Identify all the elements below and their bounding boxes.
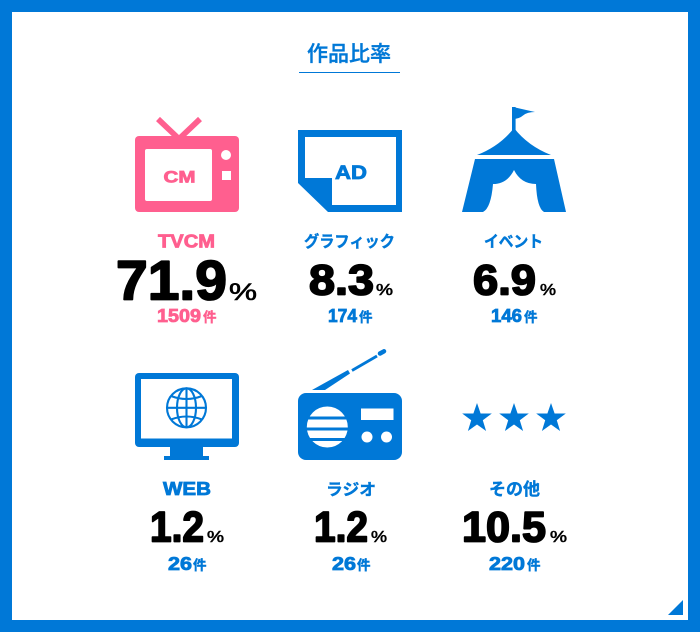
- count: 174: 174: [328, 305, 358, 326]
- label: radio: ラジオ: [326, 476, 376, 500]
- label: event: イベント: [484, 228, 543, 252]
- panel: web: [135, 373, 239, 574]
- count: 26: 26: [168, 553, 192, 574]
- value: 10.5%: %: [550, 529, 567, 546]
- value: 71.9%: %: [229, 279, 257, 306]
- label: other: その他: [489, 475, 540, 500]
- count: 146: 146: [491, 305, 522, 326]
- value: 8.3%: 8.3: [309, 256, 374, 304]
- panel: TVCM: [116, 119, 257, 326]
- count: 174: [328, 305, 373, 326]
- panel: radio: [298, 351, 402, 574]
- count: 1509: 1509: [157, 305, 201, 326]
- label: TVCM: TVCM: [158, 232, 215, 252]
- value: 1.2%: %: [207, 529, 224, 546]
- count: 174: 件: [359, 306, 373, 326]
- value: 8.3%: %: [376, 282, 393, 299]
- icon: television: [135, 119, 239, 212]
- value: 71.9%: 71.9: [116, 248, 227, 312]
- count: 26: 件: [193, 554, 207, 574]
- count: 146: 件: [524, 306, 538, 326]
- icon: AD sheet: AD: [335, 163, 367, 184]
- count: 26: [332, 553, 371, 574]
- icon: three stars: [462, 403, 566, 431]
- value: 1.2%: 1.2: [314, 504, 368, 552]
- count: 1509: 件: [203, 306, 217, 326]
- count: 26: [168, 553, 207, 574]
- count: 1509: [157, 305, 217, 326]
- count: 220: [489, 553, 541, 574]
- icon: monitor with globe: [135, 373, 239, 460]
- icon: radio: [298, 351, 402, 460]
- icon: tent: [462, 107, 566, 212]
- value: 10.5%: 10.5: [462, 504, 546, 552]
- value: 6.9%: %: [540, 282, 556, 299]
- count: 26: 件: [357, 554, 371, 574]
- label: WEB: WEB: [163, 479, 211, 499]
- count: 220: 件: [527, 554, 541, 574]
- title: 作品比率: [307, 38, 391, 68]
- corner triangle: [668, 600, 683, 615]
- value: 1.2%: %: [371, 529, 387, 546]
- panel: other: [462, 403, 567, 574]
- panel: event: [462, 107, 566, 326]
- icon: AD sheet: [298, 130, 402, 212]
- value: 1.2%: 1.2: [150, 504, 204, 552]
- count: 26: 26: [332, 553, 356, 574]
- label: graphic: グラフィック: [304, 228, 395, 252]
- icon: television: CM: [164, 168, 196, 186]
- value: 6.9%: 6.9: [473, 256, 536, 304]
- count: 146: [491, 305, 538, 326]
- panel: graphic: [298, 130, 402, 326]
- count: 220: 220: [489, 553, 525, 574]
